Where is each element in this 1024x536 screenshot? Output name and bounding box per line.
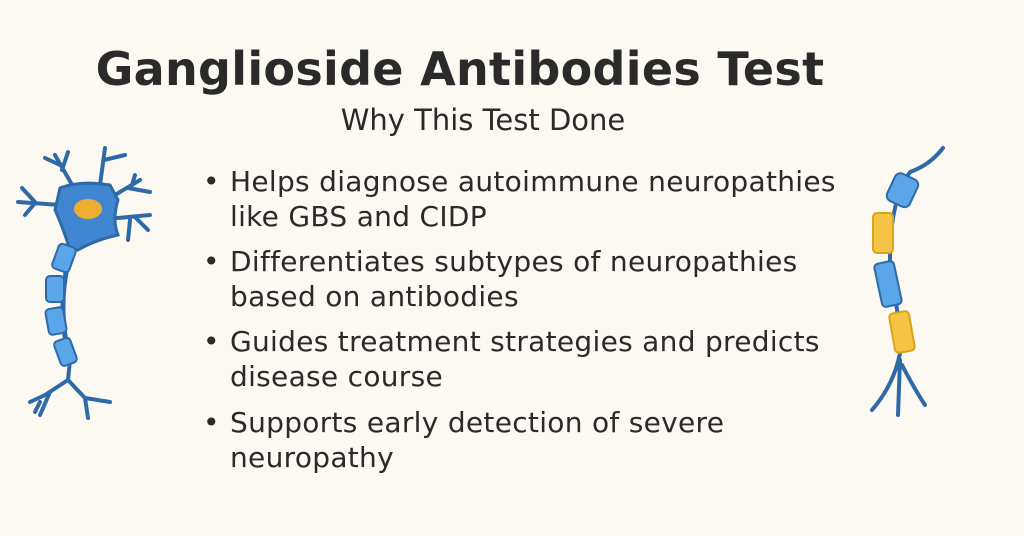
bullet 4: Supports early detection of severe [230, 406, 724, 439]
bullet 2 [203, 245, 798, 313]
bullet 1: Helps diagnose autoimmune neuropathies [230, 165, 836, 198]
bullet 3: disease course [230, 360, 443, 393]
bullet 1: like GBS and CIDP [230, 200, 487, 233]
bullet 3: Guides treatment strategies and predicts [230, 325, 820, 358]
bullet 4: • [203, 406, 220, 439]
icon: left neuron [16, 146, 152, 420]
bullet 2: • [203, 245, 220, 278]
bullet 1: • [203, 165, 220, 198]
bullet 4 [203, 406, 724, 474]
icon: right axon [870, 146, 946, 417]
bullet 2: based on antibodies [230, 280, 519, 313]
subtitle: Why This Test Done [341, 103, 625, 137]
bullet 3: • [203, 325, 220, 358]
bullet 3 [203, 325, 820, 393]
bullet 4: neuropathy [230, 441, 394, 474]
bullet 2: Differentiates subtypes of neuropathies [230, 245, 798, 278]
bullet 1 [203, 165, 836, 233]
title: Ganglioside Antibodies Test [96, 42, 824, 96]
